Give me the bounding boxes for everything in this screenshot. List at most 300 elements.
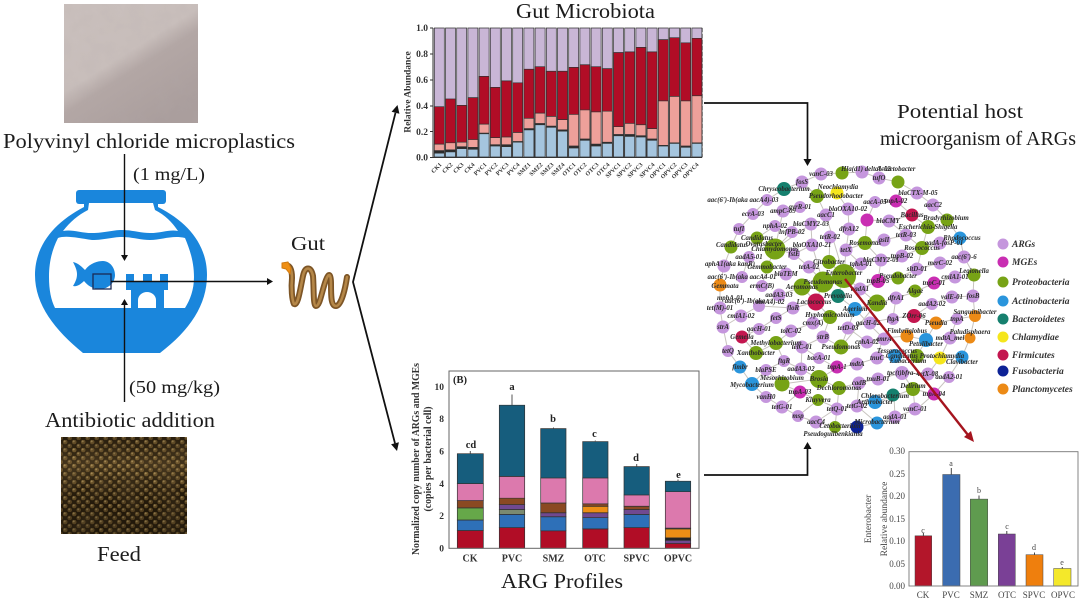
- bar: PVC: [499, 405, 525, 548]
- network node labels: aadA1: [851, 286, 869, 293]
- sample labels: OTC4: [596, 162, 611, 178]
- network node labels: Rosemonas: [848, 240, 881, 247]
- network node labels: tetR-02: [820, 234, 841, 241]
- bar: OPVC: [1054, 568, 1071, 586]
- bar: SPVC: [1026, 555, 1043, 586]
- network node labels: Hyphomicrobium: [804, 312, 855, 319]
- network node labels: Mycobacterium: [729, 382, 774, 389]
- network node labels: tetX-08: [918, 371, 939, 378]
- network node labels: Lactococcus: [796, 299, 832, 306]
- axis tick labels: 0.6: [416, 76, 428, 86]
- heading: potential host microorganism of ARGs: [880, 101, 1076, 150]
- network node labels: blaCMY2-03: [793, 221, 830, 228]
- network node labels: strA: [716, 324, 729, 331]
- heading: Gut: Gut: [291, 233, 326, 255]
- network node labels: Kandia: [866, 300, 888, 307]
- bar: SMZ: [970, 499, 988, 586]
- network node labels: aadA-01: [883, 414, 907, 421]
- network node labels: aac(6')-Ib(aka: [725, 298, 766, 305]
- network nodes: Chlamydiae: [830, 186, 946, 364]
- chart: ARG profiles stacked bars: [411, 363, 699, 564]
- significance letters: [921, 459, 1064, 567]
- icon: fish: [73, 261, 115, 289]
- network node labels: tetD-03: [838, 325, 859, 332]
- bar: CK: [915, 536, 932, 586]
- network node labels: blaTEM: [774, 271, 799, 278]
- sample labels: CK4: [464, 162, 476, 175]
- category labels: OPVC: [664, 554, 692, 564]
- network node labels: merC-02: [928, 260, 953, 267]
- network node labels: [705, 166, 997, 438]
- y tick labels: 0.20: [889, 491, 906, 501]
- network node labels: Gemella: [730, 334, 754, 341]
- y tick labels: 4: [439, 480, 444, 490]
- network node labels: tufO: [873, 175, 886, 182]
- network node labels: Fimbriiglobus: [887, 328, 927, 335]
- axis tick labels: 0.8: [416, 50, 428, 60]
- photo: PVC microplastics powder: [64, 4, 198, 123]
- network node labels: aslI: [879, 237, 890, 244]
- category labels: PVC: [942, 590, 960, 600]
- network node labels: Mesorhizobium: [759, 375, 804, 382]
- arrow: antibiotic into bowl: [121, 299, 128, 402]
- y tick labels: 6: [439, 447, 444, 457]
- legend item: MGEs: [998, 256, 1038, 268]
- network node labels: floR: [787, 305, 800, 312]
- sample labels: OPVC2: [660, 162, 678, 181]
- network node labels: Pseudomonas: [804, 279, 843, 286]
- network node labels: ermC(B): [750, 283, 774, 290]
- y tick labels: 0.00: [889, 581, 906, 591]
- network node labels: Prevotella: [824, 293, 853, 300]
- significance letters: [466, 382, 681, 481]
- bar: OTC: [998, 534, 1015, 586]
- network node labels: fosS: [796, 179, 808, 186]
- sample labels: SMZ4: [551, 162, 566, 178]
- network node labels: nphA-02: [763, 223, 788, 230]
- significance letters: a: [509, 382, 515, 393]
- network node labels: Hla(d1) delta1-02: [840, 166, 891, 173]
- axis tick labels: 0.0: [416, 154, 428, 164]
- axis tick labels: 0.2: [416, 128, 428, 138]
- network node labels: aacC1: [817, 212, 835, 219]
- y tick labels: 0.25: [889, 469, 906, 479]
- network node labels: Cetobacterium: [819, 423, 861, 430]
- network node labels: ampC-09: [770, 208, 796, 215]
- significance letters: e: [676, 470, 681, 481]
- network node labels: Gemmobacter: [747, 264, 787, 271]
- network node labels: tolC-02: [781, 328, 802, 335]
- chart: gut microbiota stacked bars: [404, 24, 702, 181]
- network node labels: blaCTX-M-05: [898, 190, 938, 197]
- network node labels: Aeromonas: [785, 284, 818, 291]
- network node labels: Tessaracoccus: [877, 348, 917, 355]
- axis titles: Normalized copy number of ARGs and MGEs: [411, 363, 422, 555]
- network node labels: Enterobacter: [825, 270, 863, 277]
- network node labels: mdtA_mel: [936, 335, 964, 342]
- network node labels: qacH-02: [856, 320, 881, 327]
- bar: OPVC: [665, 481, 691, 548]
- network node labels: tnpA-1: [827, 364, 847, 371]
- legend item: Actinobacteria: Actinobacteria: [1011, 297, 1070, 307]
- y tick labels: 8: [439, 415, 444, 425]
- legend item: Bacteroidetes: Bacteroidetes: [1011, 315, 1065, 325]
- heading: ARG Profiles: ARG Profiles: [501, 569, 623, 593]
- network node labels: tnpB-02: [891, 253, 914, 260]
- network node labels: Paludisphaera: [950, 329, 991, 336]
- axis title: relative abundance: Relative Abundance: [404, 51, 414, 133]
- sample labels: CK3: [453, 162, 465, 175]
- network node labels: cphA-02: [855, 339, 879, 346]
- network node labels: tnpB-05: [867, 278, 890, 285]
- legend item: Planctomycetes: Planctomycetes: [1012, 385, 1073, 395]
- network node labels: blaPSE: [755, 367, 777, 374]
- heading: potential host microorganism of ARGs: Potential host: [897, 101, 1023, 123]
- y tick labels: 10: [434, 383, 444, 393]
- y tick labels: 0.30: [889, 446, 906, 456]
- network node labels: bacA-01: [807, 355, 831, 362]
- network node labels: Bacillus: [899, 212, 924, 219]
- network node labels: sltD-01: [906, 266, 927, 273]
- legend item: Firmicutes: Firmicutes: [1011, 351, 1055, 361]
- y tick labels: [434, 383, 444, 554]
- axes: [430, 28, 702, 158]
- network node labels: tufI: [734, 226, 745, 233]
- network node labels: Candidatus Protochlamydia: [886, 353, 965, 360]
- bar: SMZ: [541, 429, 566, 548]
- sample labels: OTC2: [573, 162, 588, 178]
- sample labels: OTC3: [585, 162, 600, 178]
- network node labels: tghA-01: [850, 261, 872, 268]
- network node labels: aadA3-03: [765, 292, 793, 299]
- heading: potential host microorganism of ARGs: microorganism of ARGs: [880, 128, 1076, 150]
- legend item: Fusobacteria: Fusobacteria: [1011, 367, 1064, 377]
- network node labels: tnpA-03: [789, 389, 812, 396]
- sample labels: SMZ2: [529, 162, 544, 178]
- network node labels: Candidatus: [741, 235, 773, 242]
- network node labels: Chryseobacterium: [758, 186, 810, 193]
- network node labels: aacA4)-02: [755, 299, 785, 306]
- network node labels: tetG-02: [847, 403, 868, 410]
- category labels: [462, 554, 692, 564]
- significance letters: c: [921, 526, 925, 535]
- panel tag: (B): [453, 375, 468, 386]
- network node labels: mphA-01: [717, 295, 743, 302]
- sample labels: OTC1: [562, 162, 577, 178]
- network node labels: Escherichia-Shigella: [898, 224, 958, 231]
- network node labels: fimbr: [732, 364, 748, 371]
- legend item: ARGs: [998, 238, 1036, 250]
- axis tick labels: [416, 24, 428, 164]
- sample labels: PVC4: [506, 162, 521, 177]
- legend item: Firmicutes: [998, 350, 1055, 361]
- network node labels: vanH0: [757, 394, 776, 401]
- network node labels: Petulibacter: [909, 341, 943, 348]
- sample labels: CK1: [431, 162, 443, 175]
- arrow: ARG profiles to network: [704, 442, 812, 475]
- network node labels: cadB: [852, 380, 867, 387]
- network node labels: aadA2-01: [935, 374, 963, 381]
- network node labels: Acinetobacter: [876, 166, 916, 173]
- category labels: SMZ: [543, 554, 565, 564]
- network node labels: aadA3-02: [787, 366, 815, 373]
- network node labels: Xanthobacter: [736, 350, 775, 357]
- network: ARG host co-occurrence: [705, 166, 997, 438]
- axis tick labels: 0.4: [416, 102, 428, 112]
- arrow: microbiota to network: [704, 103, 812, 166]
- network node labels: qacH-01: [747, 326, 771, 333]
- network node labels: Ovatusbacter: [745, 241, 783, 248]
- heading: Antibiotic addition: Antibiotic addition: [45, 408, 216, 432]
- bar: OTC: [583, 442, 608, 548]
- network node labels: Clavibacter: [946, 359, 978, 366]
- network node labels: Kluyvera: [804, 397, 831, 404]
- network node labels: tetX: [840, 247, 852, 254]
- heading: Feed: Feed: [97, 542, 142, 566]
- significance letters: cd: [466, 440, 476, 451]
- marker: fish gut sample box: [93, 274, 111, 289]
- category labels: [917, 590, 1075, 600]
- legend item: Proteobacteria: [998, 276, 1070, 288]
- network node labels: gyrR-01: [788, 204, 811, 211]
- network node labels: aacC2: [924, 202, 942, 209]
- legend item: Planctomycetes: [998, 384, 1073, 395]
- significance letters: d: [1032, 543, 1036, 552]
- network edges: [720, 172, 975, 427]
- bar: SPVC: [624, 467, 649, 548]
- arrow: fish to gut: [111, 278, 273, 285]
- legend item: Fusobacteria: [998, 366, 1064, 377]
- stacked bars: [457, 405, 691, 548]
- significance letters: d: [633, 453, 639, 464]
- error bars: [470, 394, 678, 482]
- network node labels: Roseococcus: [903, 245, 940, 252]
- category labels: SPVC: [623, 554, 650, 564]
- network node labels: blaCMY2-01: [863, 257, 899, 264]
- network node labels: Candidatus: [716, 242, 748, 249]
- network node labels: blaOXA10-21: [793, 242, 831, 249]
- network node labels: tnpA-04: [923, 391, 946, 398]
- stacked bars: [434, 28, 702, 157]
- significance letters: c: [1005, 522, 1009, 531]
- network node labels: Microbacterium: [853, 419, 900, 426]
- sample labels: SPVC2: [616, 162, 633, 180]
- network node labels: vanC-03: [809, 171, 833, 178]
- icon: castle: [126, 274, 168, 308]
- network node labels: Bradyrhizobium: [922, 215, 969, 222]
- sample labels: SPVC3: [627, 162, 644, 180]
- category labels: PVC: [502, 554, 522, 564]
- network nodes: Firmicutes: [736, 208, 921, 344]
- axis titles: Relative abundance: [880, 482, 890, 556]
- arrow: red pointer from Enterobacter to bar chart: [845, 279, 974, 442]
- network node labels: aac(6')-Ib(aka aacA4)-03: [707, 197, 779, 204]
- network node labels: Dechloromonas: [816, 385, 862, 392]
- network node labels: Sanguinibacter: [953, 309, 997, 316]
- network node labels: tpc(t)bfra-1: [887, 370, 919, 377]
- network node labels: fosB: [967, 293, 980, 300]
- network node labels: Chlorobacterium: [861, 393, 909, 400]
- network node labels: Pseudia: [925, 320, 948, 327]
- network node labels: Delirium: [899, 383, 926, 390]
- error bars: [923, 468, 1062, 568]
- network node labels: Arthrobacter: [856, 399, 893, 406]
- network node labels: tetR-03: [896, 232, 917, 239]
- significance letters: b: [977, 486, 981, 495]
- network node labels: tet(M)-01: [707, 305, 733, 312]
- network node labels: aac(6')-6: [951, 254, 977, 261]
- network node labels: dfrA1: [888, 295, 904, 302]
- legend item: Chlamydiae: Chlamydiae: [1012, 333, 1060, 343]
- network node labels: Pseudorhodobacter: [809, 193, 864, 200]
- significance letters: b: [550, 414, 556, 425]
- network node labels: msp: [792, 413, 804, 420]
- y tick labels: 0.15: [889, 514, 906, 524]
- legend item: MGEs: MGEs: [1011, 258, 1038, 268]
- network node labels: dfrA12: [839, 226, 859, 233]
- network node labels: Methylobacterium: [749, 340, 802, 347]
- network node labels: ZOrr-06: [901, 313, 926, 320]
- network node labels: aadA-fosP-01: [925, 240, 963, 247]
- network node labels: fetS: [771, 315, 782, 322]
- network node labels: cmx(A): [803, 320, 823, 327]
- arrow: PVC into bowl: [121, 154, 128, 261]
- y tick labels: 0.10: [889, 536, 906, 546]
- network node labels: aphA1(aka kanR): [705, 261, 755, 268]
- dose label: 1 mg/L: (1 mg/L): [133, 164, 205, 185]
- network node labels: Pseudobacter: [879, 273, 917, 280]
- bar: CK: [457, 454, 483, 548]
- network node labels: tetQ: [722, 348, 734, 355]
- network node labels: tnuC: [870, 355, 884, 362]
- network node labels: vanC-01: [903, 406, 927, 413]
- network node labels: Algae: [906, 288, 923, 295]
- sample labels: PVC2: [484, 162, 499, 177]
- dose label: 50 mg/kg: (50 mg/kg): [129, 377, 220, 398]
- arrows: gut branches to microbiota and ARG charts: [353, 105, 399, 451]
- axis titles: (copies per bacterial cell): [423, 406, 434, 512]
- y tick labels: 2: [439, 512, 444, 522]
- axis tick labels: 1.0: [416, 24, 428, 34]
- bar: PVC: [943, 474, 960, 586]
- sample labels: SPVC1: [605, 162, 622, 180]
- network node labels: Legionella: [958, 268, 990, 275]
- y tick labels: 0: [439, 544, 444, 554]
- network node labels: tnpA: [950, 316, 964, 323]
- category labels: SPVC: [1023, 590, 1045, 600]
- legend item: Bacteroidetes: [998, 314, 1065, 325]
- sample labels: SMZ3: [540, 162, 555, 178]
- y tick labels: 0.05: [889, 559, 906, 569]
- network nodes: Planctomycetes: [714, 278, 981, 344]
- sample labels: SPVC4: [639, 162, 656, 180]
- legend item: Actinobacteria: [998, 296, 1070, 307]
- sample labels: PVC1: [473, 162, 488, 177]
- network node labels: mdtA: [849, 361, 865, 368]
- network node labels: fstE: [788, 251, 800, 258]
- sample labels: OPVC4: [682, 162, 700, 181]
- sample labels: PVC3: [495, 162, 510, 177]
- significance letters: c: [592, 429, 597, 440]
- network node labels: Neochlamydia: [817, 184, 859, 191]
- network node labels: Agerium: [842, 306, 867, 313]
- network node labels: ftgR: [778, 358, 791, 365]
- network node labels: blaCMY: [876, 218, 901, 225]
- network node labels: Brosia: [809, 376, 829, 383]
- network node labels: aadA5-01: [735, 254, 763, 261]
- network node labels: blaOXA10-02: [829, 206, 868, 213]
- network node labels: aacA-05: [863, 199, 887, 206]
- network nodes: Actinobacteria: [734, 232, 968, 430]
- network node labels: tetA-02: [799, 264, 820, 271]
- network nodes: ARGs: [714, 166, 980, 428]
- category labels: SMZ: [970, 590, 988, 600]
- network nodes: Bacteroidetes: [777, 182, 900, 402]
- network node labels: tnuB-01: [866, 376, 890, 383]
- network node labels: Pseudoguilbenkiania: [803, 431, 863, 438]
- network node labels: lnfPB-02: [779, 229, 805, 236]
- network node labels: ecrA-03: [742, 211, 765, 218]
- plot frame: [449, 371, 699, 548]
- significance letters: a: [949, 459, 953, 468]
- legend item: Proteobacteria: Proteobacteria: [1012, 278, 1070, 288]
- network node labels: tnpA-02: [885, 198, 908, 205]
- sample labels: CK2: [442, 162, 454, 175]
- network node labels: aadA2-02: [918, 301, 946, 308]
- network nodes: MGEs: [794, 194, 940, 400]
- legend item: ARGs: ARGs: [1011, 240, 1036, 250]
- legend item: Chlamydiae: [998, 332, 1060, 343]
- network node labels: aacC4: [807, 419, 825, 426]
- axis titles: [411, 363, 434, 555]
- network node labels: Pseudomonas: [822, 344, 861, 351]
- sample labels: OPVC1: [649, 162, 667, 181]
- category labels: CK: [917, 590, 930, 600]
- category labels: OTC: [998, 590, 1016, 600]
- axis titles: [864, 482, 890, 556]
- network node labels: emrA: [876, 336, 892, 343]
- network node labels: cmlA1-01: [941, 274, 969, 281]
- axis titles: Enterobacter: [864, 494, 874, 543]
- icon: fish bowl with fish and castle: [35, 190, 207, 353]
- y tick labels: [889, 446, 906, 591]
- chart: Enterobacter relative abundance: [864, 446, 1078, 600]
- network node labels: cmlA1-02: [727, 313, 755, 320]
- network nodes: Fusobacteria: [850, 420, 864, 434]
- network node labels: ftgA: [887, 316, 900, 323]
- network node labels: valE-01: [941, 294, 963, 301]
- network node labels: Citrobacter: [813, 259, 845, 266]
- legend: taxa and gene types: [998, 238, 1073, 395]
- heading: Polyvinyl chloride microplastics: Polyvinyl chloride microplastics: [3, 129, 295, 153]
- significance letters: e: [1060, 558, 1064, 567]
- network node labels: Rhodococcus: [942, 235, 981, 242]
- network nodes: Proteobacteria: [724, 166, 980, 433]
- network node labels: tnpC-01: [923, 280, 945, 287]
- category labels: OPVC: [1051, 590, 1075, 600]
- network node labels: tetQ-01: [827, 406, 847, 413]
- category labels: OTC: [584, 554, 606, 564]
- network node labels: tetG-01: [772, 404, 792, 411]
- network node labels: strB: [816, 334, 829, 341]
- photo: feed pellets: [61, 437, 187, 534]
- sample labels: SMZ1: [517, 162, 532, 178]
- network node labels: Chlamydomonas: [751, 246, 799, 253]
- network node labels: Gemmata: [711, 283, 739, 290]
- network node labels: tetC-01: [792, 344, 812, 351]
- plot frame: [909, 452, 1078, 586]
- network node labels: aac(6')-Ib(aka aacA4-01: [708, 274, 776, 281]
